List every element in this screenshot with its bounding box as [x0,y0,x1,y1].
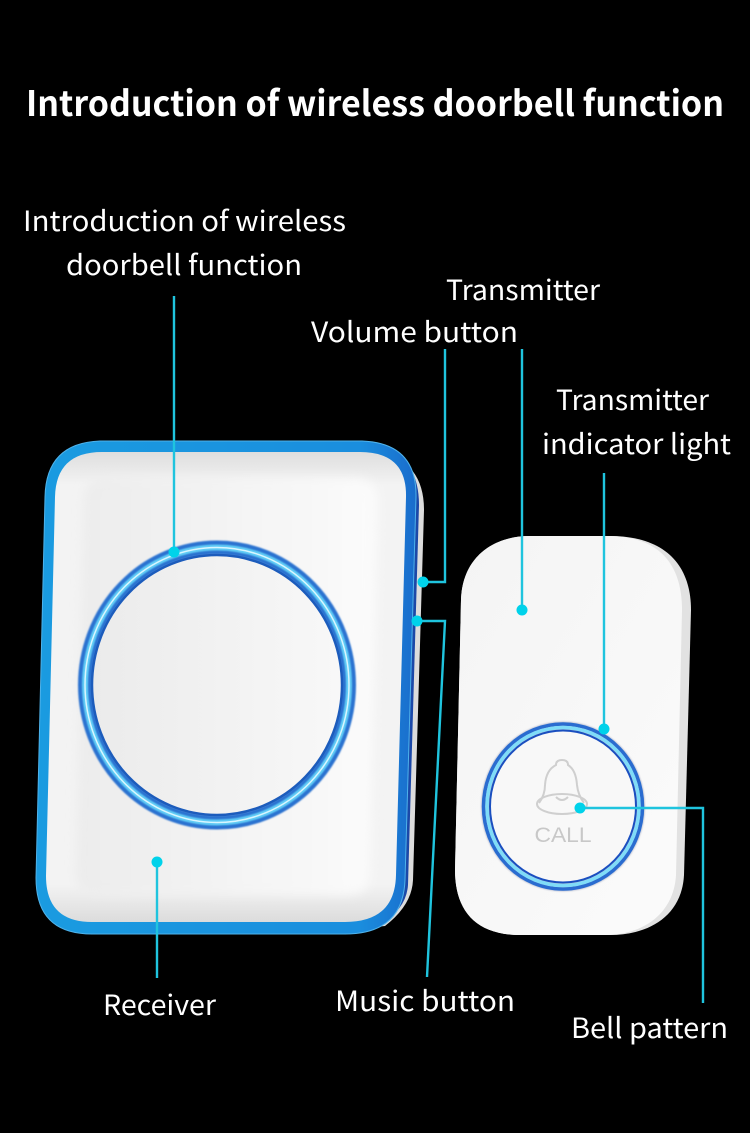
transmitter device [455,536,691,935]
label: introduction of wireless doorbell function: doorbell function [66,244,302,284]
transmitter side shell [455,536,691,935]
label: volume button: Volume button [311,311,518,351]
receiver back shell [340,452,424,930]
call label: CALL [534,824,592,847]
callout: ring leader [168,296,180,558]
label: receiver: Receiver [103,984,216,1024]
receiver white face [46,452,406,922]
receiver device [36,441,424,934]
label: transmitter indicator light [542,379,731,463]
label: music button: Music button [335,980,515,1020]
label: transmitter indicator light: indicator light [542,423,731,463]
receiver blue frame [36,441,416,934]
callout: indicator leader [598,473,610,734]
label: introduction of wireless doorbell function [23,200,346,284]
label: bell pattern: Bell pattern [571,1007,728,1047]
callout: volume leader [418,349,445,588]
icon: bell [537,760,587,814]
call button ring [481,722,645,892]
callout: bell leader [574,802,703,1003]
callout: music leader [412,616,445,977]
label: introduction of wireless doorbell function: Introduction of wireless [23,200,346,240]
callout: receiver leader [152,856,162,978]
label: transmitter indicator light: Transmitter [556,379,709,419]
callout: transmitter leader [516,349,528,616]
receiver ring [85,548,349,822]
title: Introduction of wireless doorbell function [26,76,724,127]
label: transmitter: Transmitter [446,269,600,309]
transmitter body [455,536,682,935]
